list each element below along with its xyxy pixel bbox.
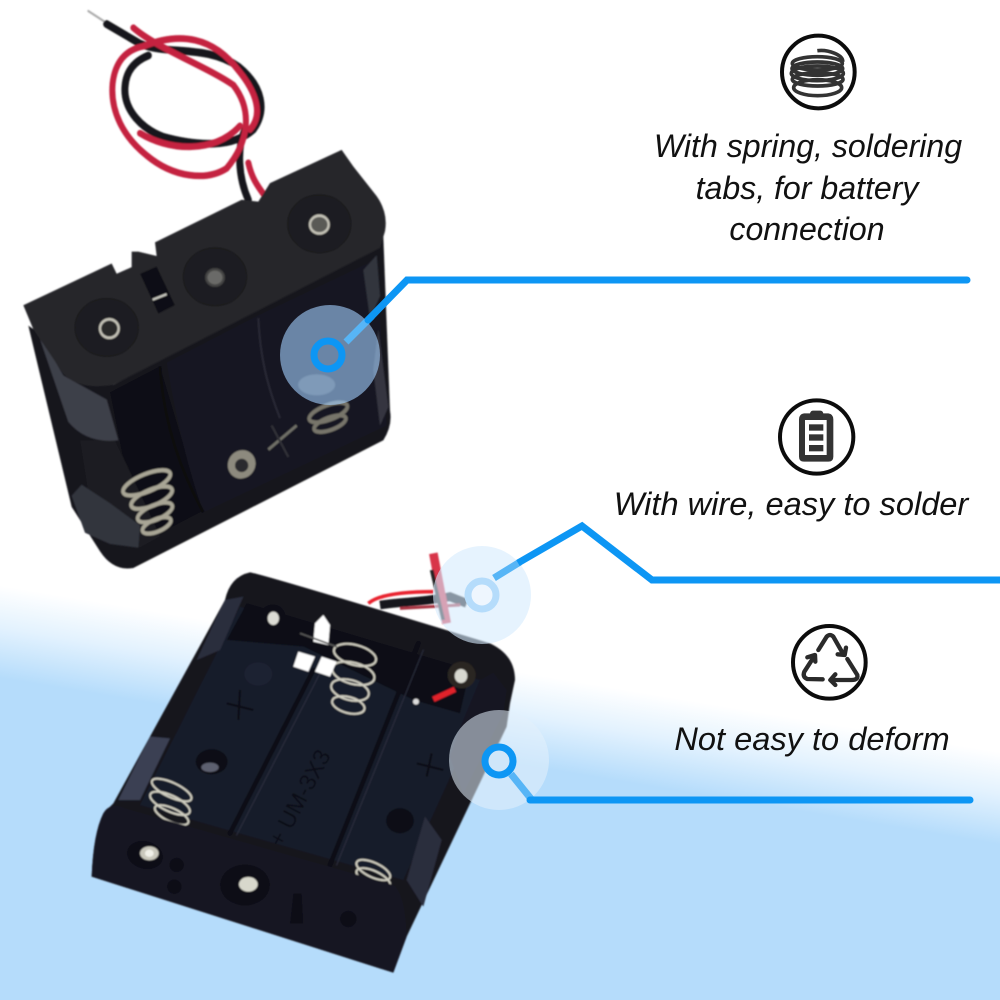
interior: [140, 607, 480, 880]
solder tabs and contacts: [260, 605, 476, 705]
icon: spring coil: [782, 36, 855, 108]
callout: wire pointer: [433, 526, 1000, 644]
text: spring and tabs feature: With spring, soldering: [654, 128, 962, 164]
wires: [88, 11, 265, 200]
springs: [120, 399, 349, 537]
switch slot: [140, 266, 175, 314]
holder body: [28, 237, 391, 569]
end face details: [124, 837, 357, 927]
end face: [92, 806, 407, 973]
callout: spring and tabs pointer: [280, 280, 967, 405]
side clips: [118, 597, 507, 907]
text: spring and tabs feature: [654, 128, 962, 247]
side tabs: [37, 329, 118, 441]
callout: not easy to deform pointer: [449, 710, 970, 810]
text: spring and tabs feature: tabs, for battery: [696, 170, 920, 206]
recessed discs and contacts: [75, 195, 351, 356]
contact and plus mark: [224, 374, 335, 483]
moulded plus marks, holes: [196, 662, 443, 833]
moulded text: + UM-3X3: [263, 745, 336, 851]
springs: [147, 640, 393, 893]
text: wire feature: With wire, easy to solder: [614, 485, 969, 522]
photo: bottom battery holder: [92, 553, 515, 973]
icon: battery: [780, 400, 853, 474]
holder body: [92, 572, 515, 973]
compartment ribs: [230, 643, 423, 865]
wires: [368, 553, 467, 623]
interior shadow: [227, 603, 470, 713]
compartments: [80, 259, 387, 548]
icon: recycle triangle: [793, 626, 866, 699]
photo: top battery holder: [23, 11, 391, 569]
text: deform feature: Not easy to deform: [674, 720, 950, 757]
text: spring and tabs feature: connection: [729, 211, 885, 247]
top face: [23, 150, 386, 386]
